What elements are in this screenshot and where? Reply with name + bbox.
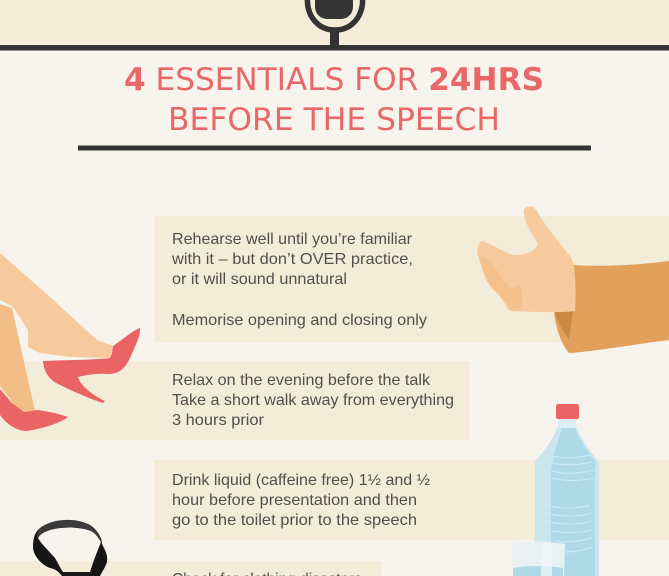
sleeve bbox=[554, 261, 669, 353]
bottle neck bbox=[558, 419, 576, 429]
text: drink: Drink liquid (caffeine free) 1½ and ½ bbox=[172, 472, 430, 489]
text: relax bbox=[172, 372, 454, 429]
front leg bbox=[0, 304, 35, 412]
text: rehearse: with it – but don’t OVER practice, bbox=[171, 251, 413, 268]
text: rehearse: Memorise opening and closing only bbox=[172, 312, 427, 329]
title rule bbox=[78, 146, 591, 150]
title: 4 ESSENTIALS FOR 24HRS bbox=[124, 62, 544, 98]
banner rule bbox=[0, 45, 669, 50]
band: clothing bbox=[0, 561, 382, 576]
glass highlight bbox=[541, 544, 552, 576]
glass water bbox=[513, 566, 563, 576]
bottle cap bbox=[556, 404, 579, 419]
band: drink bbox=[154, 460, 669, 540]
illustration: legs and red heels bbox=[0, 253, 140, 431]
illustration: black neck strap bbox=[33, 520, 107, 576]
illustration: water bottle and glass bbox=[512, 404, 599, 576]
bottle ribs bbox=[545, 455, 594, 552]
text: drink: hour before presentation and then bbox=[172, 492, 417, 509]
band: relax bbox=[0, 361, 470, 440]
finger shading bbox=[479, 256, 522, 311]
text: relax: Relax on the evening before the talk bbox=[172, 372, 431, 389]
text: rehearse bbox=[171, 231, 427, 329]
title bbox=[124, 62, 544, 138]
front shoe bbox=[0, 389, 68, 431]
text: drink bbox=[172, 472, 430, 529]
back shoe bbox=[43, 328, 140, 403]
title: BEFORE THE SPEECH bbox=[168, 102, 500, 138]
text: rehearse: Rehearse well until you’re familiar bbox=[172, 231, 413, 248]
band: rehearse bbox=[154, 216, 669, 342]
back leg bbox=[0, 253, 113, 358]
top banner bbox=[0, 0, 669, 45]
text: relax: 3 hours prior bbox=[172, 412, 265, 429]
text: rehearse: or it will sound unnatural bbox=[172, 271, 347, 288]
hand bbox=[477, 207, 576, 312]
illustration: hand and sleeve bbox=[477, 207, 669, 353]
text: relax: Take a short walk away from everything bbox=[172, 392, 454, 409]
text: drink: go to the toilet prior to the speech bbox=[172, 512, 417, 529]
icon: microphone bbox=[307, 0, 363, 47]
water bbox=[551, 428, 595, 576]
sleeve inner bbox=[555, 311, 573, 339]
glass bbox=[512, 542, 565, 576]
bottle body bbox=[535, 428, 599, 576]
